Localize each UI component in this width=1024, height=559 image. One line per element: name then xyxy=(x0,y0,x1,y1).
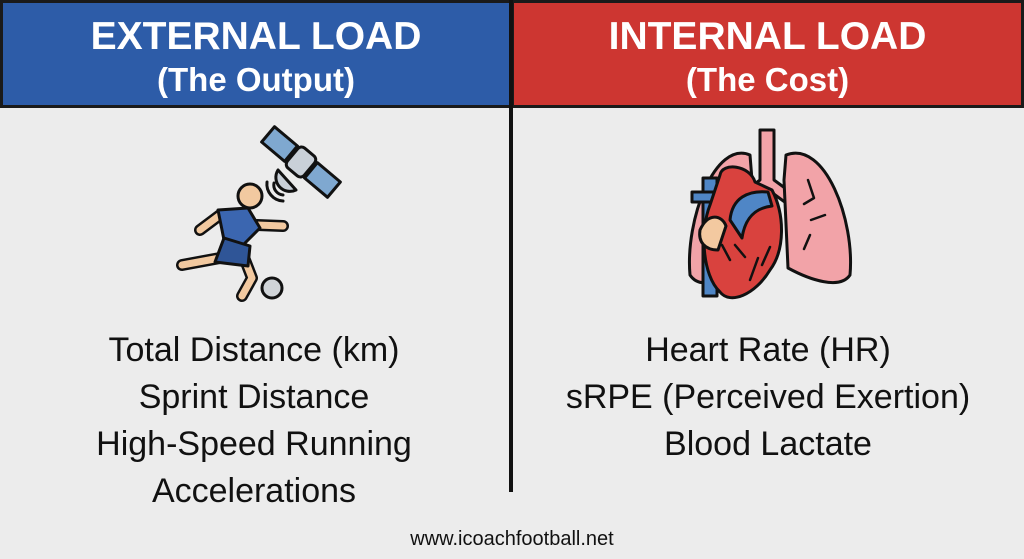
icon: heart and lungs xyxy=(688,128,852,300)
header: internal load: INTERNAL LOAD xyxy=(609,15,926,58)
list: external metrics: Sprint Distance xyxy=(139,378,369,416)
list: internal metrics: Heart Rate (HR) xyxy=(645,331,891,369)
divider xyxy=(509,0,513,492)
header: internal load xyxy=(511,0,1024,108)
icon: player with GPS satellite xyxy=(176,125,342,302)
list: internal metrics: Blood Lactate xyxy=(664,425,872,463)
list: external metrics: Accelerations xyxy=(152,472,356,510)
header: external load: (The Output) xyxy=(157,61,355,98)
list: external metrics: Total Distance (km) xyxy=(109,331,399,369)
list: external metrics: High-Speed Running xyxy=(96,425,412,463)
list: internal metrics xyxy=(566,331,970,463)
footer url: www.icoachfootball.net xyxy=(410,528,614,550)
header: external load xyxy=(0,0,512,108)
header: internal load: (The Cost) xyxy=(686,61,849,98)
list: internal metrics: sRPE (Perceived Exertion) xyxy=(566,378,970,416)
list: external metrics xyxy=(96,331,412,510)
header: external load: EXTERNAL LOAD xyxy=(91,15,421,58)
